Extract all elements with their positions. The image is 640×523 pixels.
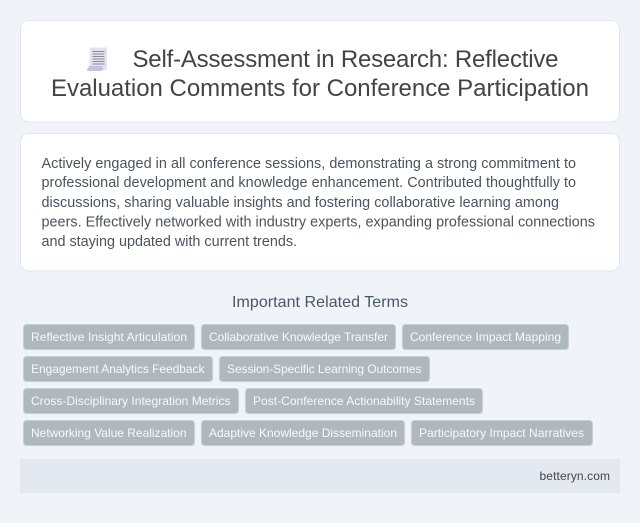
tag: Conference Impact Mapping: [410, 330, 561, 344]
tag: Engagement Analytics Feedback: [31, 362, 206, 376]
description text: Actively engaged in all conference sessions, demonstrating a strong commitment to: [42, 156, 576, 172]
related terms tags: [24, 324, 592, 446]
tag: [412, 420, 592, 446]
tag: Session-Specific Learning Outcomes: [227, 362, 422, 376]
tag: [24, 324, 194, 350]
icon: document scroll: [87, 48, 107, 71]
description text: professional development and knowledge enhancement. Contributed thoughtfully to: [42, 175, 576, 191]
description text: discussions, sharing valuable insights and fostering collaborative learning among: [42, 195, 559, 211]
tag: [24, 356, 212, 382]
tag: Participatory Impact Narratives: [419, 426, 584, 440]
tag: [24, 420, 194, 446]
tag: Networking Value Realization: [31, 426, 186, 440]
tag: Reflective Insight Articulation: [31, 330, 187, 344]
description text: peers. Effectively networked with industry experts, expanding professional connections: [42, 214, 595, 230]
footer: [20, 459, 620, 493]
description text: and staying updated with current trends.: [42, 234, 297, 250]
heading: important related terms: Important Related Terms: [232, 294, 408, 311]
tag: [202, 420, 404, 446]
title: Self-Assessment in Research: Reflective: [132, 46, 558, 73]
title: Evaluation Comments for Conference Participation: [51, 75, 589, 102]
description text: [42, 156, 595, 250]
tag: Post-Conference Actionability Statements: [253, 394, 475, 408]
tag: [402, 324, 568, 350]
footer source text: betteryn.com: [540, 469, 610, 483]
tag: [202, 324, 396, 350]
tag: [24, 388, 238, 414]
tag: Adaptive Knowledge Dissemination: [209, 426, 397, 440]
tag: [246, 388, 482, 414]
title panel: [20, 20, 620, 122]
description panel: [20, 134, 620, 271]
tag: Collaborative Knowledge Transfer: [209, 330, 388, 344]
tag: [220, 356, 430, 382]
title: [51, 46, 589, 102]
tag: Cross-Disciplinary Integration Metrics: [31, 394, 230, 408]
